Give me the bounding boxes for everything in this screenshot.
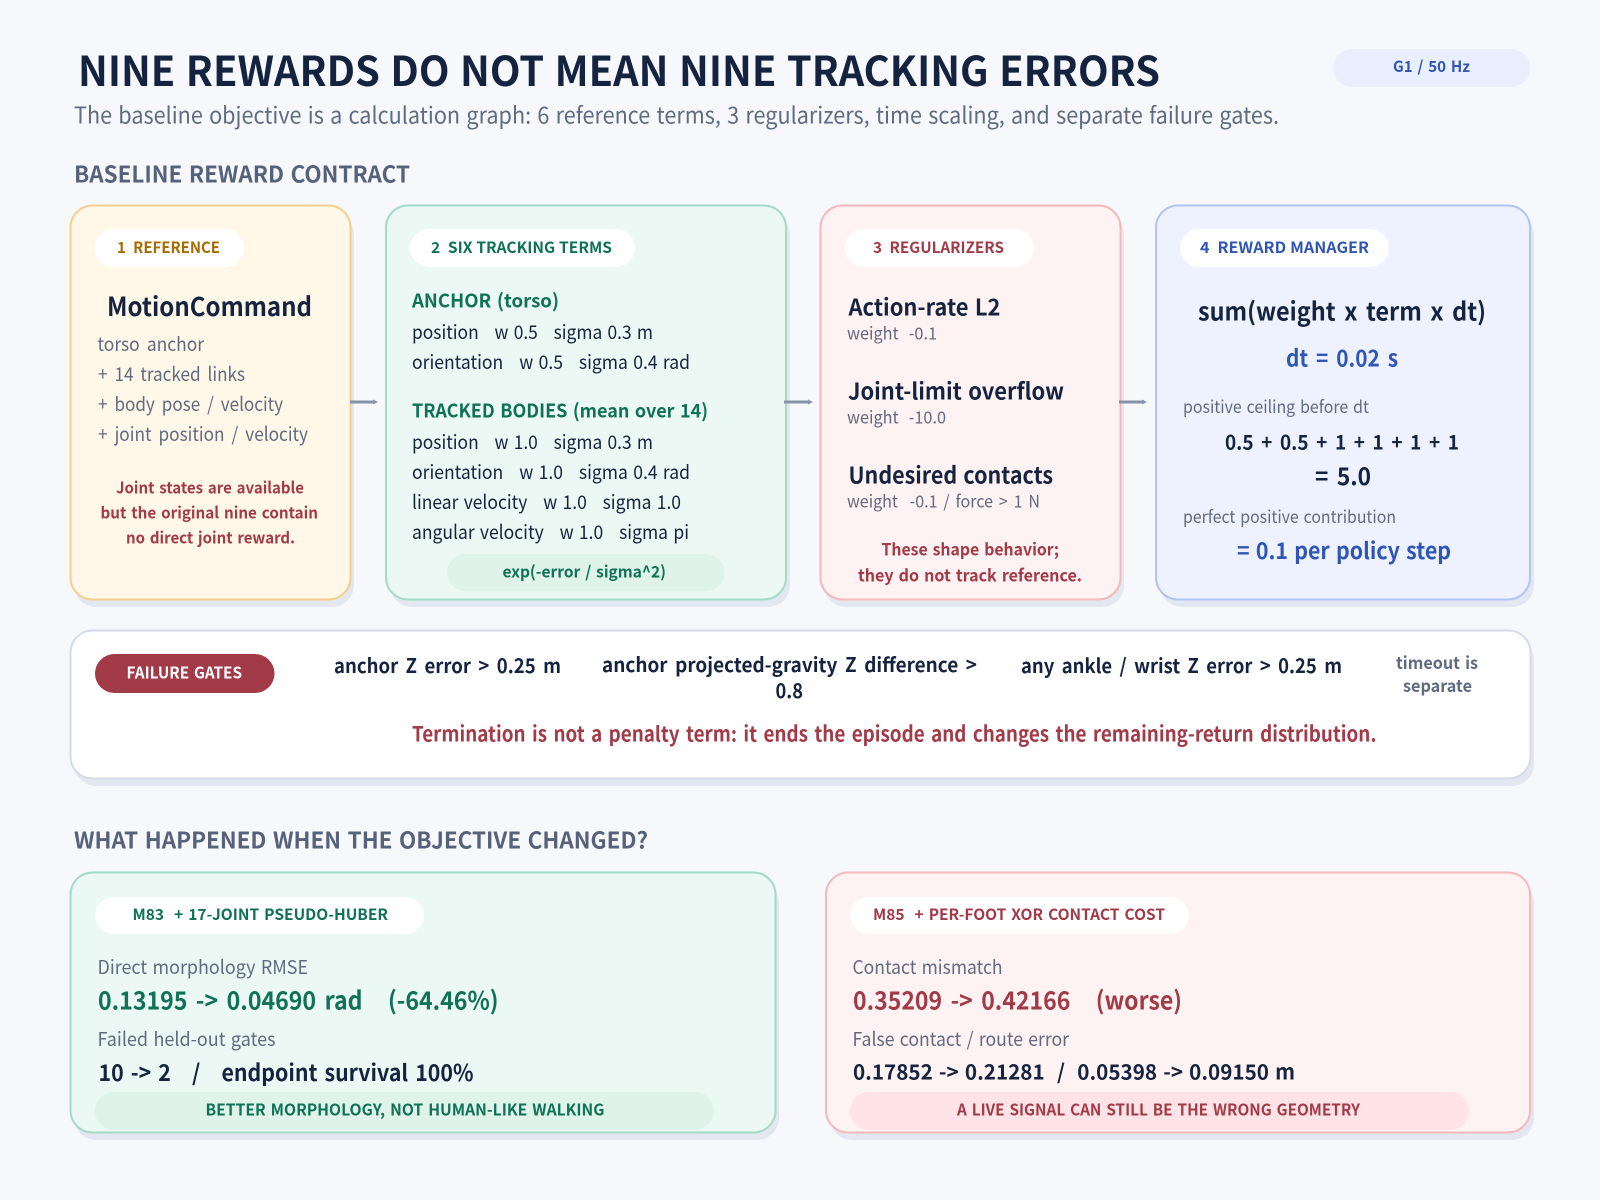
- metric: false contact and route error: [852, 1025, 1295, 1086]
- group: tracked bodies terms: angular velocity w 1.0 sigma pi: [412, 518, 689, 545]
- term: joint-limit overflow: weight -10.0: [847, 404, 946, 428]
- panel: failure gates: [70, 630, 1534, 786]
- gate: projected gravity: anchor projected-gravity Z difference >: [602, 649, 977, 678]
- note: shape behavior: These shape behavior;: [882, 536, 1059, 560]
- section heading: what happened: WHAT HAPPENED WHEN THE OBJECTIVE CHANGED?: [74, 822, 648, 856]
- term: undesired contacts: Undesired contacts: [848, 456, 1053, 490]
- note: no direct joint reward: Joint states are available: [116, 474, 304, 498]
- section heading: baseline reward contract: BASELINE REWARD CONTRACT: [74, 156, 410, 190]
- group: anchor torso terms: orientation w 0.5 sigma 0.4 rad: [412, 348, 690, 375]
- note: timeout separate: separate: [1403, 672, 1472, 697]
- heading: MotionCommand: MotionCommand: [107, 287, 312, 324]
- metric: morphology RMSE: [98, 953, 498, 1018]
- value: per policy step: = 0.1 per policy step: [1237, 532, 1451, 566]
- calculation: ceiling sum: 0.5 + 0.5 + 1 + 1 + 1 + 1: [1225, 426, 1459, 456]
- metric: false contact and route error: False contact / route error: [852, 1025, 1070, 1052]
- metric: morphology RMSE: Direct morphology RMSE: [98, 953, 308, 980]
- pill: 3 regularizers: [845, 229, 1034, 267]
- badge: G1 / 50 Hz: [1333, 49, 1530, 87]
- note: timeout separate: [1396, 649, 1478, 697]
- label: perfect positive contribution: perfect positive contribution: [1183, 503, 1396, 528]
- metric: failed gates: [98, 1025, 474, 1088]
- formula pill: exp: exp(-error / sigma^2): [502, 558, 666, 582]
- term: joint-limit overflow: [847, 372, 1064, 428]
- arrow: tracking terms to regularizers: [784, 400, 813, 404]
- pill: M83: [95, 897, 424, 934]
- panel: 1 reference: [70, 206, 354, 607]
- pill: 3 regularizers: 3 REGULARIZERS: [873, 236, 1004, 258]
- note: timeout separate: timeout is: [1396, 649, 1478, 674]
- panel: 2 six tracking terms: [386, 206, 790, 607]
- note: shape behavior: [858, 536, 1082, 586]
- gate: projected gravity: [602, 649, 977, 704]
- subtitle: The baseline objective is a calculation graph: 6 reference terms, 3 regularizers, time scaling, and separate failure gates.: [74, 96, 1279, 130]
- group: tracked bodies terms: orientation w 1.0 sigma 0.4 rad: [412, 458, 690, 485]
- group: tracked bodies terms: [412, 396, 708, 545]
- note: no direct joint reward: no direct joint reward.: [126, 524, 295, 548]
- statement: termination: Termination is not a penalty term: it ends the episode and changes the remaining-return distribution.: [412, 718, 1376, 748]
- gate: projected gravity: 0.8: [776, 675, 803, 704]
- pill: 4 reward manager: [1180, 229, 1389, 267]
- group: anchor torso terms: ANCHOR (torso): [411, 286, 559, 314]
- calculation: ceiling sum: = 5.0: [1315, 457, 1371, 492]
- metric: contact mismatch: [852, 953, 1182, 1018]
- title: NINE REWARDS DO NOT MEAN NINE TRACKING ERRORS: [78, 38, 1160, 98]
- pill: failure gates: FAILURE GATES: [126, 660, 242, 684]
- list: command contents: torso anchor: [98, 330, 205, 357]
- note: shape behavior: they do not track reference.: [858, 562, 1082, 586]
- arrow: reference to tracking terms: [350, 400, 378, 404]
- list: command contents: + 14 tracked links: [98, 360, 245, 387]
- group: anchor torso terms: [411, 286, 690, 375]
- group: tracked bodies terms: linear velocity w 1.0 sigma 1.0: [412, 488, 681, 515]
- metric: failed gates: 10 -> 2 / endpoint survival 100%: [98, 1054, 474, 1088]
- pill: 2 six tracking terms: [410, 229, 635, 267]
- list: command contents: + body pose / velocity: [98, 390, 283, 417]
- panel: M85 result: [826, 872, 1534, 1140]
- callout: wrong geometry: [850, 1092, 1469, 1130]
- metric: failed gates: Failed held-out gates: [98, 1025, 276, 1052]
- group: anchor torso terms: position w 0.5 sigma 0.3 m: [412, 318, 653, 345]
- formula: sum weight term dt: sum(weight x term x dt): [1198, 292, 1486, 328]
- value: dt: dt = 0.02 s: [1286, 340, 1398, 374]
- arrow: regularizers to reward manager: [1119, 400, 1147, 404]
- list: command contents: [98, 330, 308, 447]
- group: tracked bodies terms: TRACKED BODIES (mean over 14): [412, 396, 708, 424]
- term: action-rate L2: [847, 288, 1000, 344]
- metric: contact mismatch: 0.35209 -> 0.42166 (worse): [853, 982, 1182, 1018]
- term: undesired contacts: weight -0.1 / force > 1 N: [847, 488, 1040, 512]
- group: tracked bodies terms: position w 1.0 sigma 0.3 m: [412, 428, 653, 455]
- pill: failure gates: [95, 654, 274, 693]
- callout: wrong geometry: A LIVE SIGNAL CAN STILL BE THE WRONG GEOMETRY: [956, 1096, 1361, 1120]
- pill: M85: [850, 897, 1189, 934]
- term: undesired contacts: [847, 456, 1053, 512]
- panel: 4 reward manager: [1156, 206, 1534, 607]
- term: action-rate L2: weight -0.1: [847, 320, 937, 344]
- pill: 1 reference: 1 REFERENCE: [117, 236, 220, 258]
- pill: M83: M83 + 17-JOINT PSEUDO-HUBER: [132, 903, 388, 925]
- pill: 2 six tracking terms: 2 SIX TRACKING TERMS: [431, 236, 612, 258]
- panel: M83 result: [70, 872, 779, 1140]
- note: no direct joint reward: [100, 474, 318, 548]
- gate: anchor z error: anchor Z error > 0.25 m: [334, 650, 561, 679]
- gate: ankle wrist: any ankle / wrist Z error > 0.25 m: [1021, 650, 1342, 679]
- calculation: ceiling sum: [1225, 426, 1459, 492]
- panel: 3 regularizers: [820, 206, 1124, 607]
- pill: M85: M85 + PER-FOOT XOR CONTACT COST: [873, 903, 1165, 925]
- list: command contents: + joint position / velocity: [98, 420, 308, 447]
- metric: morphology RMSE: 0.13195 -> 0.04690 rad (-64.46%): [98, 982, 498, 1018]
- term: action-rate L2: Action-rate L2: [848, 288, 1000, 322]
- formula pill: exp: [447, 554, 724, 591]
- metric: false contact and route error: 0.17852 -> 0.21281 / 0.05398 -> 0.09150 m: [853, 1056, 1295, 1086]
- note: no direct joint reward: but the original nine contain: [100, 500, 318, 524]
- term: joint-limit overflow: Joint-limit overflow: [848, 372, 1064, 406]
- badge: G1 / 50 Hz: G1 / 50 Hz: [1393, 55, 1470, 77]
- label: positive ceiling: positive ceiling before dt: [1183, 393, 1370, 418]
- metric: contact mismatch: Contact mismatch: [852, 953, 1002, 980]
- callout: better morphology: BETTER MORPHOLOGY, NOT HUMAN-LIKE WALKING: [206, 1096, 604, 1120]
- pill: 4 reward manager: 4 REWARD MANAGER: [1200, 236, 1369, 258]
- pill: 1 reference: [95, 229, 244, 267]
- callout: better morphology: [95, 1092, 714, 1130]
